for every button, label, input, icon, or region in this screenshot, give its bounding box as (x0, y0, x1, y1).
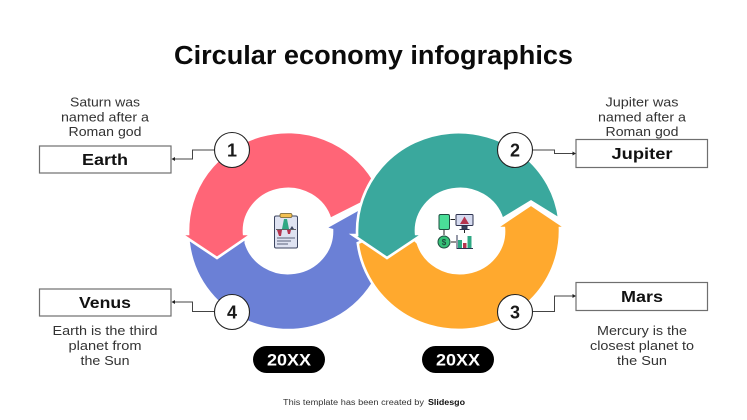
label box: Earth: Earth (82, 152, 128, 169)
description: Earth: planet from (68, 339, 142, 353)
description: Saturn: named after a (61, 110, 149, 124)
label box: Earth (40, 146, 171, 173)
description: Mercury: closest planet to (590, 339, 694, 353)
description: Jupiter: Jupiter was (606, 96, 678, 110)
arrow: 2 to Jupiter (533, 150, 576, 156)
marker: 1 (214, 132, 250, 168)
segment: orange arrow 3 (358, 204, 566, 330)
marker: 1: 1 (227, 140, 237, 160)
marker: 3 (498, 294, 532, 330)
label box: Venus: Venus (79, 295, 131, 312)
marker: 4: 4 (227, 302, 237, 322)
footer credit (283, 398, 465, 407)
date pill right (422, 346, 494, 373)
description: Mercury (590, 324, 694, 368)
label box: Venus (40, 289, 171, 316)
description: Jupiter (598, 96, 686, 139)
description: Saturn (61, 96, 149, 139)
date pill right: 20XX (436, 352, 480, 370)
arrow: 1 to Earth (172, 150, 215, 161)
description: Jupiter: Roman god (606, 125, 679, 139)
label box: Jupiter: Jupiter (612, 146, 672, 163)
footer credit: Slidesgo (428, 398, 465, 407)
panel: Jupiter (498, 96, 708, 168)
icon: phone, monitor, coin and chart: $ (442, 238, 447, 247)
marker: 2: 2 (510, 140, 520, 160)
arrow: 3 to Mars (533, 294, 576, 312)
description: Earth: the Sun (80, 354, 130, 368)
footer credit: This template has been created by (283, 398, 424, 407)
date pill left: 20XX (267, 352, 311, 370)
segment: red arrow 1 (181, 132, 380, 258)
panel: Mars (498, 282, 708, 368)
segment: blue arrow 4 (188, 200, 385, 330)
title: Circular economy infographics (174, 42, 573, 70)
icon: phone, monitor, coin and chart (438, 214, 473, 248)
label box: Jupiter (576, 140, 708, 168)
date pill left (253, 346, 325, 373)
description: Saturn: Saturn was (70, 96, 140, 110)
description: Saturn: Roman god (68, 125, 142, 139)
marker: 2 (498, 132, 532, 168)
description: Mercury: the Sun (617, 354, 667, 368)
label box: Mars: Mars (621, 289, 663, 306)
arrow: 4 to Venus (172, 300, 215, 312)
label box: Mars (576, 282, 708, 310)
marker: 4 (214, 294, 250, 330)
description: Earth: Earth is the third (52, 324, 158, 338)
panel: Earth (40, 96, 250, 173)
description: Mercury: Mercury is the (597, 324, 687, 338)
segment: teal arrow 2 (353, 132, 559, 258)
description: Earth (52, 324, 158, 368)
description: Jupiter: named after a (598, 110, 686, 124)
icon: medical clipboard (274, 214, 298, 248)
circular diagram (181, 132, 566, 330)
panel: Venus (40, 289, 250, 368)
marker: 3: 3 (510, 302, 520, 322)
